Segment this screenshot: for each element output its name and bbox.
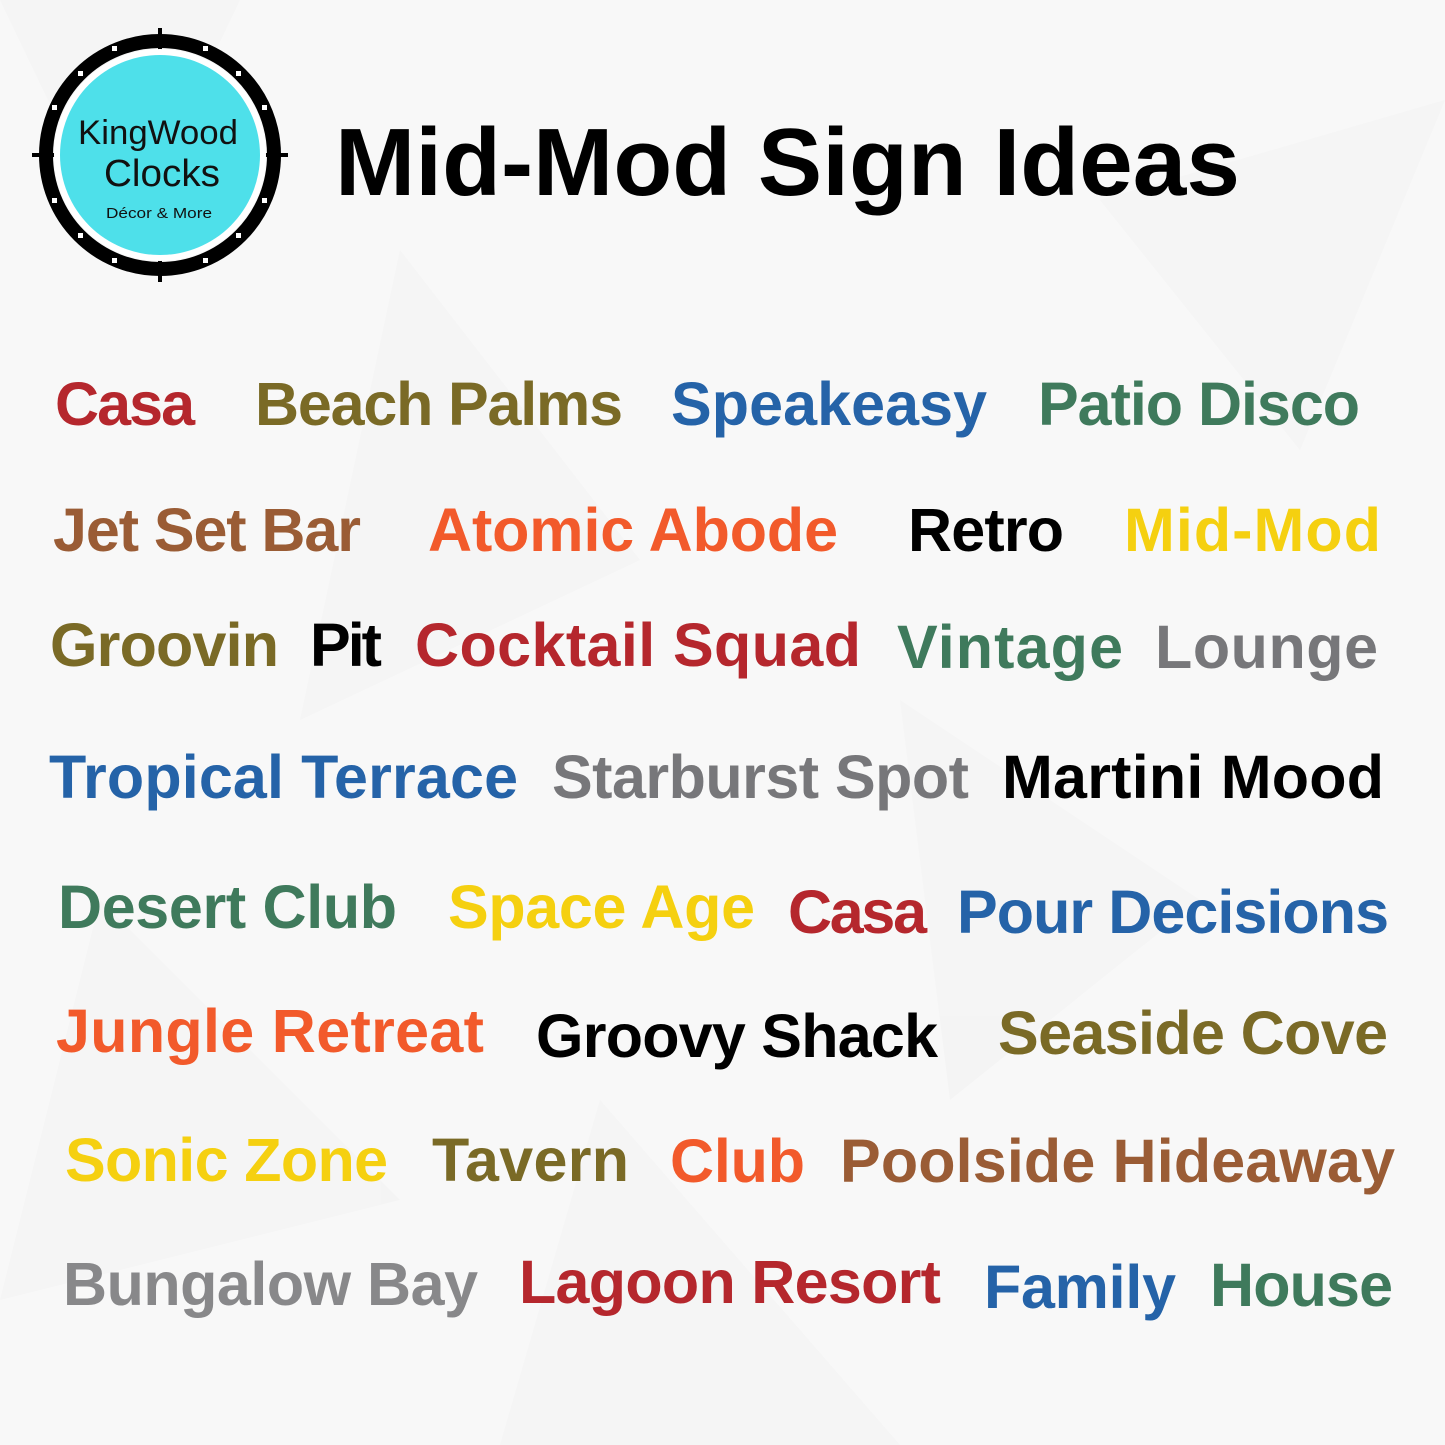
word cloud: sign ideas: Beach Palms (255, 370, 623, 438)
title: Mid-Mod Sign Ideas (335, 109, 1240, 216)
logo: KingWood Clocks: Décor & More (106, 205, 212, 222)
word cloud: sign ideas: Starburst Spot (552, 743, 969, 811)
word cloud: sign ideas: Jungle Retreat (56, 997, 484, 1065)
word cloud: sign ideas: Martini Mood (1002, 743, 1384, 811)
word cloud: sign ideas: Pit (310, 611, 382, 679)
word cloud: sign ideas: Jet Set Bar (53, 496, 361, 564)
word cloud: sign ideas: House (1210, 1251, 1393, 1319)
word cloud: sign ideas: Seaside Cove (998, 999, 1388, 1067)
word cloud: sign ideas: Mid-Mod (1124, 496, 1381, 564)
logo: KingWood Clocks: KingWood (78, 114, 238, 152)
word cloud: sign ideas: Atomic Abode (428, 496, 838, 564)
word cloud: sign ideas: Family (984, 1253, 1176, 1321)
word cloud: sign ideas: Vintage (897, 613, 1123, 681)
word cloud: sign ideas: Poolside Hideaway (840, 1127, 1395, 1195)
word cloud: sign ideas: Bungalow Bay (63, 1250, 478, 1318)
word cloud: sign ideas: Tropical Terrace (49, 743, 518, 811)
word cloud: sign ideas: Cocktail Squad (415, 611, 861, 679)
word cloud: sign ideas: Patio Disco (1038, 370, 1360, 438)
word cloud: sign ideas: Speakeasy (671, 370, 987, 438)
word cloud: sign ideas: Lounge (1155, 613, 1378, 681)
word cloud: sign ideas: Lagoon Resort (519, 1248, 941, 1316)
word cloud: sign ideas: Casa (55, 370, 196, 438)
word cloud: sign ideas: Sonic Zone (65, 1126, 388, 1194)
word cloud: sign ideas: Tavern (432, 1126, 629, 1194)
word cloud: sign ideas: Desert Club (58, 873, 397, 941)
word cloud: sign ideas: Club (670, 1127, 805, 1195)
logo: KingWood Clocks: Clocks (104, 153, 220, 195)
word cloud: sign ideas: Groovin (50, 611, 279, 679)
word cloud: sign ideas: Retro (908, 496, 1064, 564)
logo: KingWood Clocks (32, 28, 288, 282)
word cloud: sign ideas (49, 370, 1395, 1321)
word cloud: sign ideas: Pour Decisions (957, 878, 1389, 946)
word cloud: sign ideas: Groovy Shack (536, 1002, 938, 1070)
word cloud: sign ideas: Space Age (448, 873, 755, 941)
word cloud: sign ideas: Casa (788, 878, 928, 946)
